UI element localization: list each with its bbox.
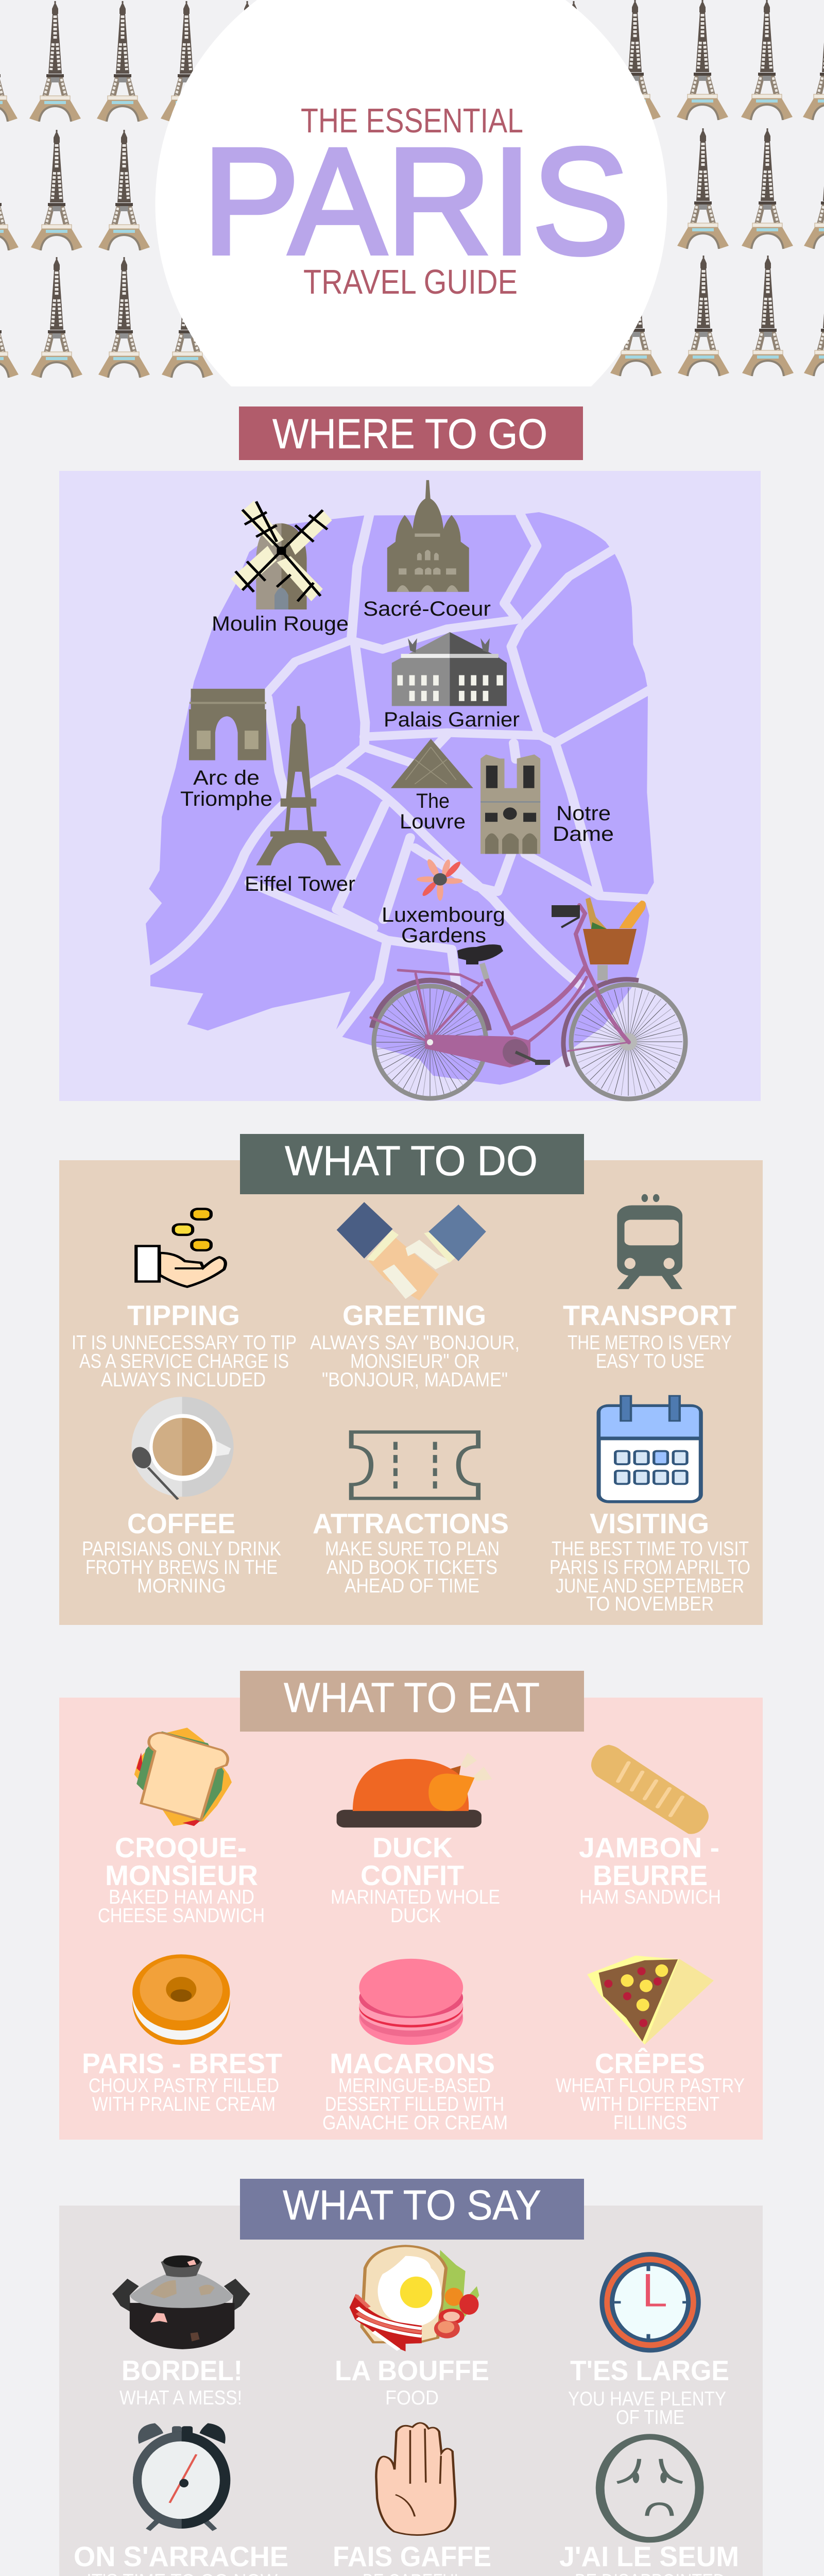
card: on s'arrache [74, 2423, 288, 2576]
card: bordel [112, 2256, 250, 2409]
label: arc de triomphe: Triomphe [180, 788, 272, 810]
icon: sacre-coeur [387, 480, 469, 592]
title: paris: PARIS [202, 117, 629, 286]
description: IT IS UNNECESSARY TO TIP [72, 1332, 297, 1354]
title: PARIS - BREST [82, 2047, 282, 2079]
map of paris [141, 512, 654, 1084]
title: DUCK [372, 1832, 453, 1863]
description: PARISIANS ONLY DRINK [82, 1538, 281, 1560]
icon: moulin rouge [231, 501, 332, 609]
description: CHOUX PASTRY FILLED [89, 2075, 279, 2097]
title: LA BOUFFE [335, 2354, 489, 2386]
label: moulin rouge: Moulin Rouge [212, 613, 349, 635]
card: coffee [82, 1397, 281, 1597]
description: DESSERT FILLED WITH [325, 2093, 504, 2115]
panel: what to say [59, 2179, 763, 2576]
description [568, 2388, 726, 2429]
title: CRÊPES [595, 2047, 705, 2079]
description: GANACHE OR CREAM [322, 2112, 508, 2134]
panel: what to do [59, 1134, 763, 1625]
title: J'AI LE SEUM [559, 2540, 739, 2572]
icon: notre dame [480, 754, 540, 854]
description: JUNE AND SEPTEMBER [556, 1575, 744, 1597]
description: "BONJOUR, MADAME" [322, 1369, 508, 1391]
description: MAKE SURE TO PLAN [325, 1538, 500, 1560]
description: AND BOOK TICKETS [327, 1556, 497, 1579]
label: eiffel tower: Eiffel Tower [245, 873, 355, 895]
description: MONSIEUR" OR [350, 1350, 480, 1372]
description: FILLINGS [613, 2112, 687, 2134]
description: HAM SANDWICH [579, 1886, 721, 1908]
description [98, 1886, 265, 1927]
card: duck confit [331, 1753, 500, 1927]
icon: eiffel tower [256, 706, 341, 866]
title [579, 1832, 719, 1891]
title: CROQUE- [115, 1832, 247, 1863]
description: EASY TO USE [596, 1350, 705, 1372]
panel: what to eat [59, 1671, 763, 2140]
title: the essential: THE ESSENTIAL [301, 101, 523, 140]
icon: alarm clock [133, 2423, 230, 2531]
description [550, 1538, 750, 1615]
title [360, 1832, 464, 1891]
label: luxembourg gardens: Gardens [401, 924, 486, 947]
description: THE BEST TIME TO VISIT [552, 1538, 749, 1560]
description: PARIS IS FROM APRIL TO [550, 1556, 750, 1579]
label: luxembourg gardens [382, 904, 505, 947]
card: macarons [322, 1959, 508, 2134]
icon: coffee cup [129, 1397, 234, 1499]
icon: macaron [359, 1959, 463, 2045]
description: MERINGUE-BASED [338, 2075, 491, 2097]
section heading: what to eat: WHAT TO EAT [284, 1674, 540, 1721]
card: t'es large [568, 2252, 729, 2429]
icon: paris-brest pastry [132, 1954, 230, 2045]
description: MARINATED WHOLE [331, 1886, 500, 1908]
card: fais gaffe [333, 2423, 491, 2576]
description: WHEAT FLOUR PASTRY [556, 2075, 745, 2097]
title: VISITING [590, 1507, 709, 1539]
icon: the louvre [391, 739, 473, 788]
title: BEURRE [593, 1859, 708, 1891]
label: notre dame: Dame [553, 823, 614, 845]
description: DUCK [390, 1905, 441, 1927]
title: TIPPING [127, 1299, 240, 1331]
icon: train [617, 1194, 682, 1289]
eiffel tower pattern [0, 0, 824, 378]
icon: crepe [587, 1956, 714, 2045]
icon: ticket [351, 1432, 478, 1498]
title: FAIS GAFFE [333, 2540, 491, 2572]
icon: palais garnier [392, 632, 507, 706]
card: la bouffe [335, 2246, 489, 2409]
icon: baguette [591, 1745, 709, 1834]
description: CHEESE SANDWICH [98, 1905, 265, 1927]
panel: where to go map [59, 471, 761, 1103]
icon: calendar [599, 1396, 701, 1502]
card: visiting [550, 1396, 750, 1615]
description [310, 1332, 520, 1391]
description [325, 1538, 500, 1597]
icon: flower [417, 858, 462, 901]
white circle header [155, 0, 667, 386]
section heading: what to say: WHAT TO SAY [283, 2182, 541, 2229]
section heading: what to eat [240, 1671, 584, 1732]
title: TRANSPORT [563, 1299, 736, 1331]
description [72, 1332, 297, 1391]
label: the louvre [400, 790, 466, 833]
description: TO NOVEMBER [586, 1593, 714, 1615]
icon: coins and hand [136, 1209, 226, 1287]
label: the louvre: Louvre [400, 810, 466, 833]
title: CONFIT [360, 1859, 464, 1891]
description: YOU HAVE PLENTY [568, 2388, 726, 2410]
icon: bicycle [369, 897, 689, 1103]
section heading: what to do: WHAT TO DO [285, 1138, 538, 1184]
label: notre dame: Notre [556, 802, 611, 825]
icon: stop hand [376, 2423, 455, 2535]
label: notre dame [553, 802, 614, 845]
title: ATTRACTIONS [313, 1507, 509, 1539]
description: WHAT A MESS! [119, 2387, 242, 2409]
description: THE METRO IS VERY [568, 1332, 732, 1354]
icon: handshake [337, 1202, 486, 1300]
label: luxembourg gardens: Luxembourg [382, 904, 505, 926]
icon: sandwich [134, 1727, 232, 1826]
card: j'ai le seum [559, 2437, 739, 2576]
card: attractions [313, 1432, 509, 1597]
description [322, 2075, 508, 2134]
description: WITH PRALINE CREAM [92, 2093, 276, 2115]
description [331, 1886, 500, 1927]
title: travel guide: TRAVEL GUIDE [303, 263, 518, 301]
section heading: where to go: WHERE TO GO [272, 411, 547, 457]
title [105, 1832, 258, 1891]
description [89, 2075, 279, 2115]
description: WITH DIFFERENT [580, 2093, 719, 2115]
title: COFFEE [127, 1507, 235, 1539]
description: OF TIME [616, 2406, 684, 2429]
title: MACARONS [330, 2047, 495, 2079]
description: FROTHY BREWS IN THE [85, 1556, 278, 1579]
card: jambon-beurre [579, 1745, 721, 1908]
card: transport [563, 1194, 736, 1372]
title: MONSIEUR [105, 1859, 258, 1891]
title: BORDEL! [122, 2354, 243, 2386]
card: tipping [72, 1209, 297, 1391]
icon: wall clock [599, 2252, 701, 2352]
description: ALWAYS SAY "BONJOUR, [310, 1332, 520, 1354]
icon: roast duck [337, 1753, 492, 1827]
section heading: what to say [240, 2179, 584, 2240]
label: arc de triomphe [180, 767, 272, 810]
label: the louvre: The [416, 790, 450, 812]
description: MORNING [137, 1575, 226, 1597]
title: GREETING [342, 1299, 486, 1331]
title: T'ES LARGE [570, 2354, 729, 2386]
icon: arc de triomphe [189, 689, 266, 760]
title: JAMBON - [579, 1832, 719, 1863]
description [556, 2075, 745, 2134]
label: arc de triomphe: Arc de [193, 767, 260, 789]
title: ON S'ARRACHE [74, 2540, 288, 2572]
card: crepes [556, 1956, 745, 2134]
description: BAKED HAM AND [109, 1886, 254, 1908]
description [82, 1538, 281, 1597]
icon: dirty pot [112, 2256, 250, 2349]
section heading: what to do [240, 1134, 584, 1194]
card: greeting [310, 1202, 520, 1391]
description: FOOD [385, 2387, 439, 2409]
label: palais garnier: Palais Garnier [384, 708, 520, 731]
icon: breakfast toast [350, 2246, 479, 2351]
card: paris-brest [82, 1954, 282, 2115]
label: sacre-coeur: Sacré-Coeur [363, 598, 491, 620]
description [568, 1332, 732, 1372]
description: ALWAYS INCLUDED [101, 1369, 266, 1391]
card: croque-monsieur [98, 1727, 265, 1927]
description: AHEAD OF TIME [345, 1575, 479, 1597]
icon: sad face [600, 2437, 699, 2540]
description: AS A SERVICE CHARGE IS [79, 1350, 289, 1372]
